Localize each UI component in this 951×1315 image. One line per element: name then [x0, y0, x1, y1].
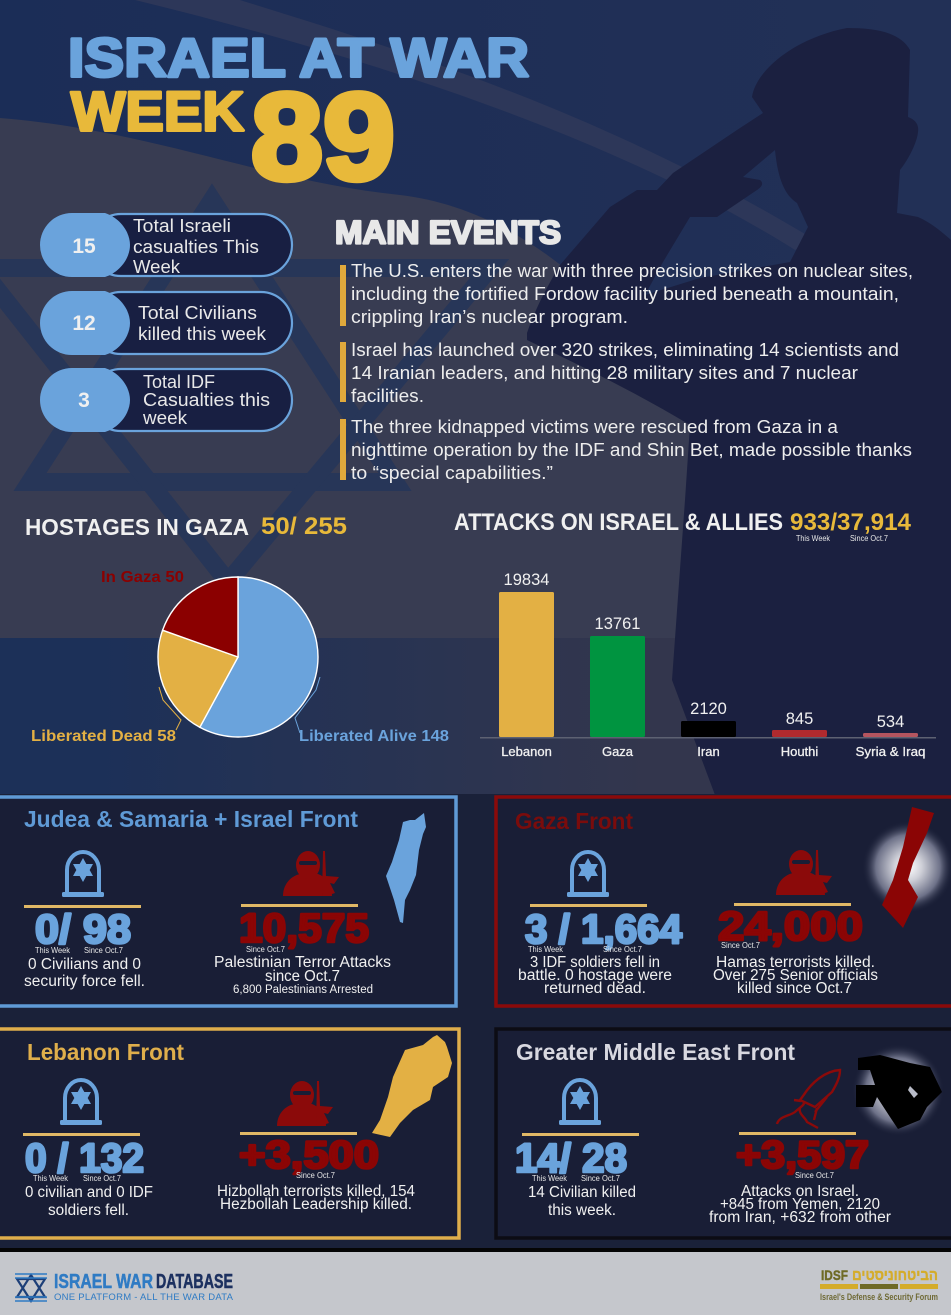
event 1: crippling Iran’s nuclear program. — [351, 307, 628, 327]
heading: Greater Middle East Front — [516, 1039, 795, 1065]
pill: total casualties: 15 — [72, 235, 96, 258]
panel: Greater Middle East front: 14 Civilian killed — [528, 1184, 636, 1201]
panel: Lebanon front: Hizbollah terrorists killed, 154 — [217, 1183, 415, 1200]
title: 89 — [251, 69, 395, 206]
heading: attacks: ATTACKS ON ISRAEL & ALLIES — [454, 509, 783, 536]
heading: hostages — [25, 513, 347, 540]
panel: Gaza front: killed since Oct.7 — [737, 980, 852, 997]
pill: civilians: killed this week — [138, 324, 267, 344]
heading: attacks: Since Oct.7 — [850, 534, 888, 543]
panel: Greater Middle East front: Since Oct.7 — [581, 1174, 621, 1183]
title: ISRAEL AT WAR — [68, 26, 529, 88]
pill: total casualties: Total Israeli — [133, 216, 231, 236]
panel: Judea and Samaria front: 6,800 Palestinians Arrested — [233, 984, 373, 996]
panel: Judea and Samaria front: This Week — [35, 946, 71, 955]
background: flag and soldier — [0, 0, 951, 796]
panel: Greater Middle East front: from Iran, +632 from other — [709, 1209, 891, 1226]
panel: Greater Middle East front: +845 from Yemen, 2120 — [720, 1196, 880, 1213]
panel: Judea and Samaria front: security force fell. — [24, 973, 145, 990]
icon: tombstone — [567, 852, 609, 897]
logo: Israel War Database: ISRAEL WAR — [54, 1271, 153, 1293]
panel: Lebanon front: Hezbollah Leadership killed. — [220, 1196, 412, 1213]
bar chart: attacks: 13761 — [595, 615, 640, 633]
killed number: +3,500 — [239, 1134, 379, 1177]
attacks number: 10,575 — [239, 905, 369, 951]
icon: tombstone — [62, 852, 104, 897]
label: in Gaza: In Gaza 50 — [101, 569, 184, 586]
event 2: facilities. — [351, 386, 424, 406]
logo: IDSF — [820, 1267, 938, 1303]
logo: Israel War Database — [15, 1271, 234, 1303]
panel: Judea and Samaria front: Palestinian Terror Attacks — [214, 954, 391, 971]
heading: Gaza Front — [515, 808, 633, 834]
footer — [0, 1248, 951, 1315]
event 3: nighttime operation by the IDF and Shin Bet, made possible thanks — [351, 440, 912, 460]
panel: Gaza front — [496, 797, 951, 1006]
event 1: including the fortified Fordow facility buried beneath a mountain, — [351, 284, 899, 304]
event 2: 14 Iranian leaders, and hitting 28 military sites and 7 nuclear — [351, 363, 858, 383]
bar chart: attacks: 534 — [877, 713, 904, 731]
panel: Lebanon front: This Week — [33, 1174, 69, 1183]
heading: attacks — [454, 509, 912, 543]
panel: Gaza front: This Week — [528, 945, 564, 954]
pill: IDF: week — [142, 408, 188, 428]
panel: Judea and Samaria front: since Oct.7 — [265, 968, 340, 985]
panel: Gaza front: returned dead. — [544, 980, 646, 997]
pill: civilians — [40, 291, 292, 355]
icon: fighter — [776, 850, 832, 895]
icon: fighter — [283, 851, 339, 896]
heading: hostages: 50/ 255 — [261, 513, 347, 540]
panel: Greater Middle East front: Since Oct.7 — [795, 1171, 835, 1180]
casualties number: 0/ 98 — [35, 906, 131, 952]
panel: Gaza front: 3 IDF soldiers fell in — [530, 954, 660, 971]
heading: attacks: 933/37,914 — [790, 509, 912, 536]
panel: Greater Middle East front: this week. — [548, 1202, 616, 1219]
pill: IDF: Casualties this — [143, 390, 270, 410]
logo: Israel War Database: DATABASE — [156, 1271, 233, 1293]
panel: Gaza front: Over 275 Senior officials — [713, 967, 878, 984]
icon: rocket — [777, 1070, 840, 1128]
title — [68, 26, 529, 206]
panel: Judea and Samaria front: Since Oct.7 — [246, 945, 286, 954]
pill: civilians: Total Civilians — [138, 303, 257, 323]
heading: hostages: HOSTAGES IN GAZA — [25, 514, 249, 540]
panel: Gaza front: Hamas terrorists killed. — [716, 954, 875, 971]
event 3: to “special capabilities.” — [351, 463, 553, 483]
pill: IDF: Total IDF — [143, 372, 215, 392]
map: Gaza — [862, 807, 951, 928]
bar chart: attacks: 19834 — [504, 571, 549, 589]
panel: Greater Middle East front: This Week — [532, 1174, 568, 1183]
label: liberated dead: Liberated Dead 58 — [31, 728, 176, 745]
title: WEEK — [71, 80, 244, 142]
icon: fighter — [277, 1081, 333, 1126]
pill: total casualties: Week — [133, 257, 181, 277]
attacks number: +3,597 — [736, 1134, 869, 1177]
bar chart: attacks: Syria & Iraq — [856, 744, 926, 759]
bar chart: attacks: 2120 — [690, 700, 727, 718]
panel: Lebanon front — [0, 1029, 459, 1238]
killed number: 24,000 — [718, 903, 863, 949]
bar chart: attacks — [480, 571, 936, 759]
bar chart: attacks: Gaza — [602, 744, 634, 759]
event 3: The three kidnapped victims were rescued from Gaza in a — [351, 417, 839, 437]
map: Middle East — [852, 1044, 944, 1136]
stat pills — [40, 213, 292, 432]
bar chart: attacks: Iran — [697, 744, 720, 759]
panel: Greater Middle East front — [496, 1029, 951, 1238]
panel: Judea and Samaria front — [0, 797, 456, 1006]
event 2 — [340, 340, 899, 406]
heading: Lebanon Front — [27, 1039, 184, 1065]
pill: IDF — [40, 368, 292, 432]
heading: Judea & Samaria + Israel Front — [24, 806, 358, 832]
bar chart: attacks: 845 — [786, 710, 813, 728]
panel: Gaza front: Since Oct.7 — [721, 941, 761, 950]
panel: Judea and Samaria front: 0 Civilians and 0 — [28, 956, 141, 973]
lower background — [0, 794, 951, 1250]
event 1 — [340, 261, 913, 327]
bar chart: attacks: Lebanon — [501, 744, 552, 759]
event 1: The U.S. enters the war with three precision strikes on nuclear sites, — [351, 261, 913, 281]
logo: IDSF: הביטחוניסטים — [852, 1267, 938, 1284]
event 2: Israel has launched over 320 strikes, eliminating 14 scientists and — [351, 340, 899, 360]
label: liberated alive: Liberated Alive 148 — [299, 728, 449, 745]
heading: MAIN EVENTS — [335, 214, 561, 250]
logo: IDSF: IDSF — [821, 1267, 848, 1283]
logo: Israel War Database: ONE PLATFORM - ALL THE WAR DATA — [54, 1292, 234, 1303]
panel: Lebanon front: 0 civilian and 0 IDF — [25, 1184, 153, 1201]
event 3 — [340, 417, 912, 483]
panel: Gaza front: Since Oct.7 — [603, 945, 643, 954]
icon: tombstone — [60, 1080, 102, 1125]
panel: Lebanon front: Since Oct.7 — [83, 1174, 121, 1183]
casualties number: 0 / 132 — [25, 1135, 144, 1181]
map: Lebanon — [372, 1035, 452, 1137]
panel: Greater Middle East front: Attacks on Israel. — [741, 1183, 859, 1200]
casualties number: 3 / 1,664 — [525, 906, 682, 952]
icon: tombstone — [559, 1080, 601, 1125]
heading: attacks: This Week — [796, 534, 831, 543]
main events — [335, 214, 913, 483]
pill: civilians: 12 — [72, 312, 96, 335]
pill: total casualties: casualties This — [133, 237, 259, 257]
panel: Lebanon front: Since Oct.7 — [296, 1171, 336, 1180]
casualties number: 14/ 28 — [515, 1135, 627, 1181]
panel: Lebanon front: soldiers fell. — [48, 1202, 129, 1219]
panel: Judea and Samaria front: Since Oct.7 — [84, 946, 124, 955]
pill: total casualties — [40, 213, 292, 277]
bar chart: attacks: Houthi — [781, 744, 818, 759]
pie chart: hostages — [31, 569, 449, 745]
map: Israel — [386, 813, 426, 923]
panel: Gaza front: battle. 0 hostage were — [518, 967, 672, 984]
pill: IDF: 3 — [78, 389, 90, 412]
